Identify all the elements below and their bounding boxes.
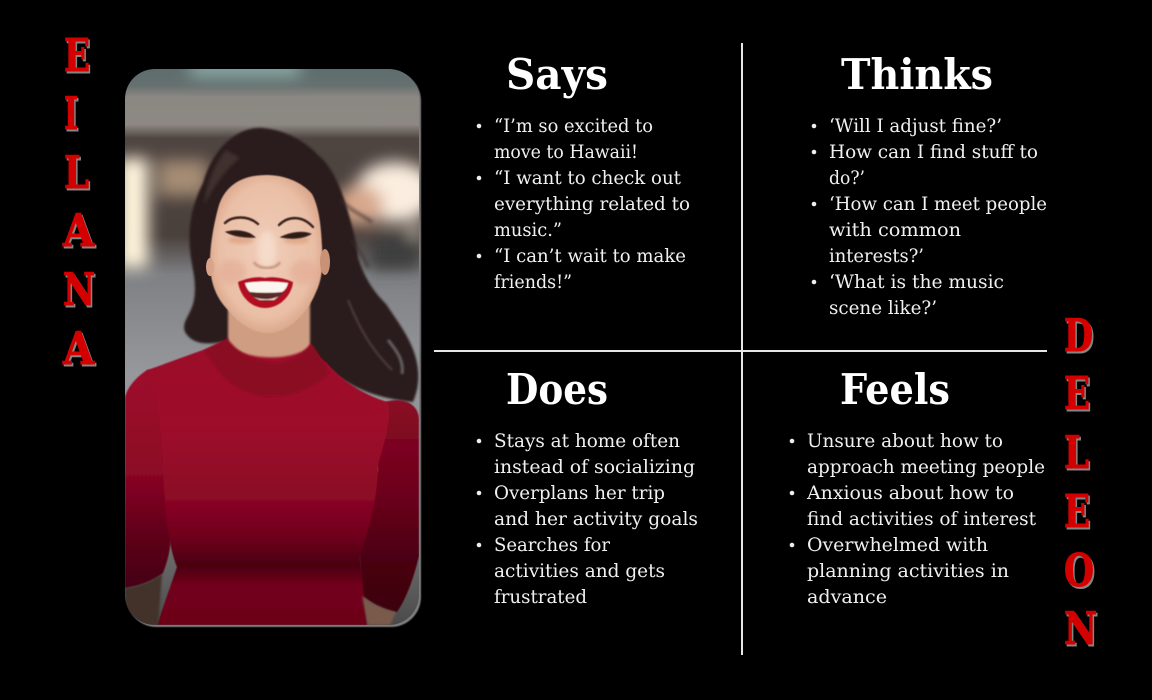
name: EILANA vertical: N	[64, 265, 96, 318]
eye shadow	[228, 236, 309, 244]
divider: horizontal line	[434, 350, 1047, 352]
name: EILANA vertical: N	[63, 263, 95, 316]
text block: Does bullets: instead of socializing	[494, 456, 695, 478]
name: DELEON vertical: N	[1066, 604, 1098, 657]
text block: Thinks bullets: with common	[829, 219, 961, 241]
name: EILANA vertical: A	[62, 322, 95, 375]
heading: Feels: Feels	[840, 365, 950, 414]
text block: Does bullets	[477, 430, 698, 608]
text block: Says bullets: “I’m so excited to	[494, 115, 653, 137]
text block: Thinks bullets: How can I find stuff to	[829, 141, 1038, 163]
text block: Does bullets: Stays at home often	[494, 430, 680, 452]
name: DELEON vertical: L	[1066, 428, 1090, 481]
text block: Thinks bullets: ‘What is the music	[829, 271, 1004, 293]
text block: Does bullets: and her activity goals	[494, 508, 698, 530]
name: EILANA vertical: L	[64, 146, 89, 199]
text block: Thinks bullets	[812, 115, 1047, 319]
name: DELEON vertical: L	[1064, 426, 1089, 479]
portrait photo of smiling woman in red sweater	[118, 60, 435, 627]
name: DELEON vertical: D	[1064, 309, 1093, 362]
text block: Does bullets: activities and gets	[494, 560, 665, 582]
left sleeve	[125, 370, 170, 588]
text block: Feels bullets: approach meeting people	[807, 456, 1045, 478]
name: DELEON vertical: E	[1064, 367, 1090, 420]
name: DELEON vertical: E	[1066, 487, 1092, 540]
name: EILANA vertical	[62, 29, 96, 377]
skin arms	[125, 574, 162, 625]
name: EILANA vertical: E	[66, 31, 92, 84]
text block: Says bullets: “I want to check out	[494, 167, 681, 189]
hair back	[184, 128, 418, 402]
name: DELEON vertical: O	[1066, 546, 1096, 599]
text block: Thinks bullets: ‘How can I meet people	[829, 193, 1047, 215]
collar	[204, 338, 329, 396]
text block: Thinks bullets: interests?’	[829, 245, 924, 267]
heading: Does: Does	[506, 365, 608, 414]
brows and eyes	[225, 218, 313, 238]
name: DELEON vertical: N	[1064, 602, 1097, 655]
text block: Thinks bullets: ‘Will I adjust fine?’	[829, 115, 1002, 137]
name: DELEON vertical: D	[1066, 311, 1094, 364]
name: DELEON vertical: O	[1064, 544, 1094, 597]
text block: Thinks bullets: do?’	[829, 167, 865, 189]
text block: Says bullets: everything related to	[494, 193, 690, 215]
text block: Does bullets: Searches for	[494, 534, 611, 556]
divider: vertical line	[741, 43, 743, 655]
text block: Thinks bullets: scene like?’	[829, 297, 937, 319]
text block: Says bullets: music.”	[494, 219, 562, 241]
mouth	[238, 277, 293, 308]
name: EILANA vertical: E	[64, 29, 90, 82]
name: DELEON vertical	[1064, 309, 1098, 657]
text block: Does bullets: frustrated	[494, 586, 587, 608]
name: EILANA vertical: L	[66, 148, 90, 201]
text block: Feels bullets: find activities of interest	[807, 508, 1036, 530]
text block: Feels bullets: Overwhelmed with	[807, 534, 988, 556]
text block: Feels bullets: Unsure about how to	[807, 430, 1003, 452]
name: EILANA vertical: I	[66, 89, 80, 142]
text block: Feels bullets: planning activities in	[807, 560, 1009, 582]
text block: Says bullets	[477, 115, 690, 293]
right sleeve	[358, 400, 419, 612]
neck	[228, 300, 310, 357]
text block: Feels bullets: Anxious about how to	[806, 482, 1014, 504]
text block: Says bullets: friends!”	[494, 271, 572, 293]
nose	[258, 231, 276, 269]
name: DELEON vertical: E	[1064, 485, 1090, 538]
text block: Says bullets: “I can’t wait to make	[494, 245, 686, 267]
text block: Does bullets: Overplans her trip	[494, 482, 665, 504]
heading: Says: Says	[506, 50, 608, 99]
cheeks	[220, 260, 314, 283]
face	[210, 175, 322, 333]
heading: Thinks: Thinks	[841, 50, 993, 99]
name: EILANA vertical: A	[64, 206, 96, 259]
name: EILANA vertical: A	[62, 204, 95, 257]
name: EILANA vertical: I	[64, 87, 78, 140]
text block: Feels bullets	[790, 430, 1045, 608]
name: DELEON vertical: E	[1066, 369, 1092, 422]
name: EILANA vertical: A	[64, 324, 96, 377]
torso	[147, 340, 389, 625]
text block: Feels bullets: advance	[807, 586, 887, 608]
text block: Says bullets: move to Hawaii!	[494, 141, 638, 163]
